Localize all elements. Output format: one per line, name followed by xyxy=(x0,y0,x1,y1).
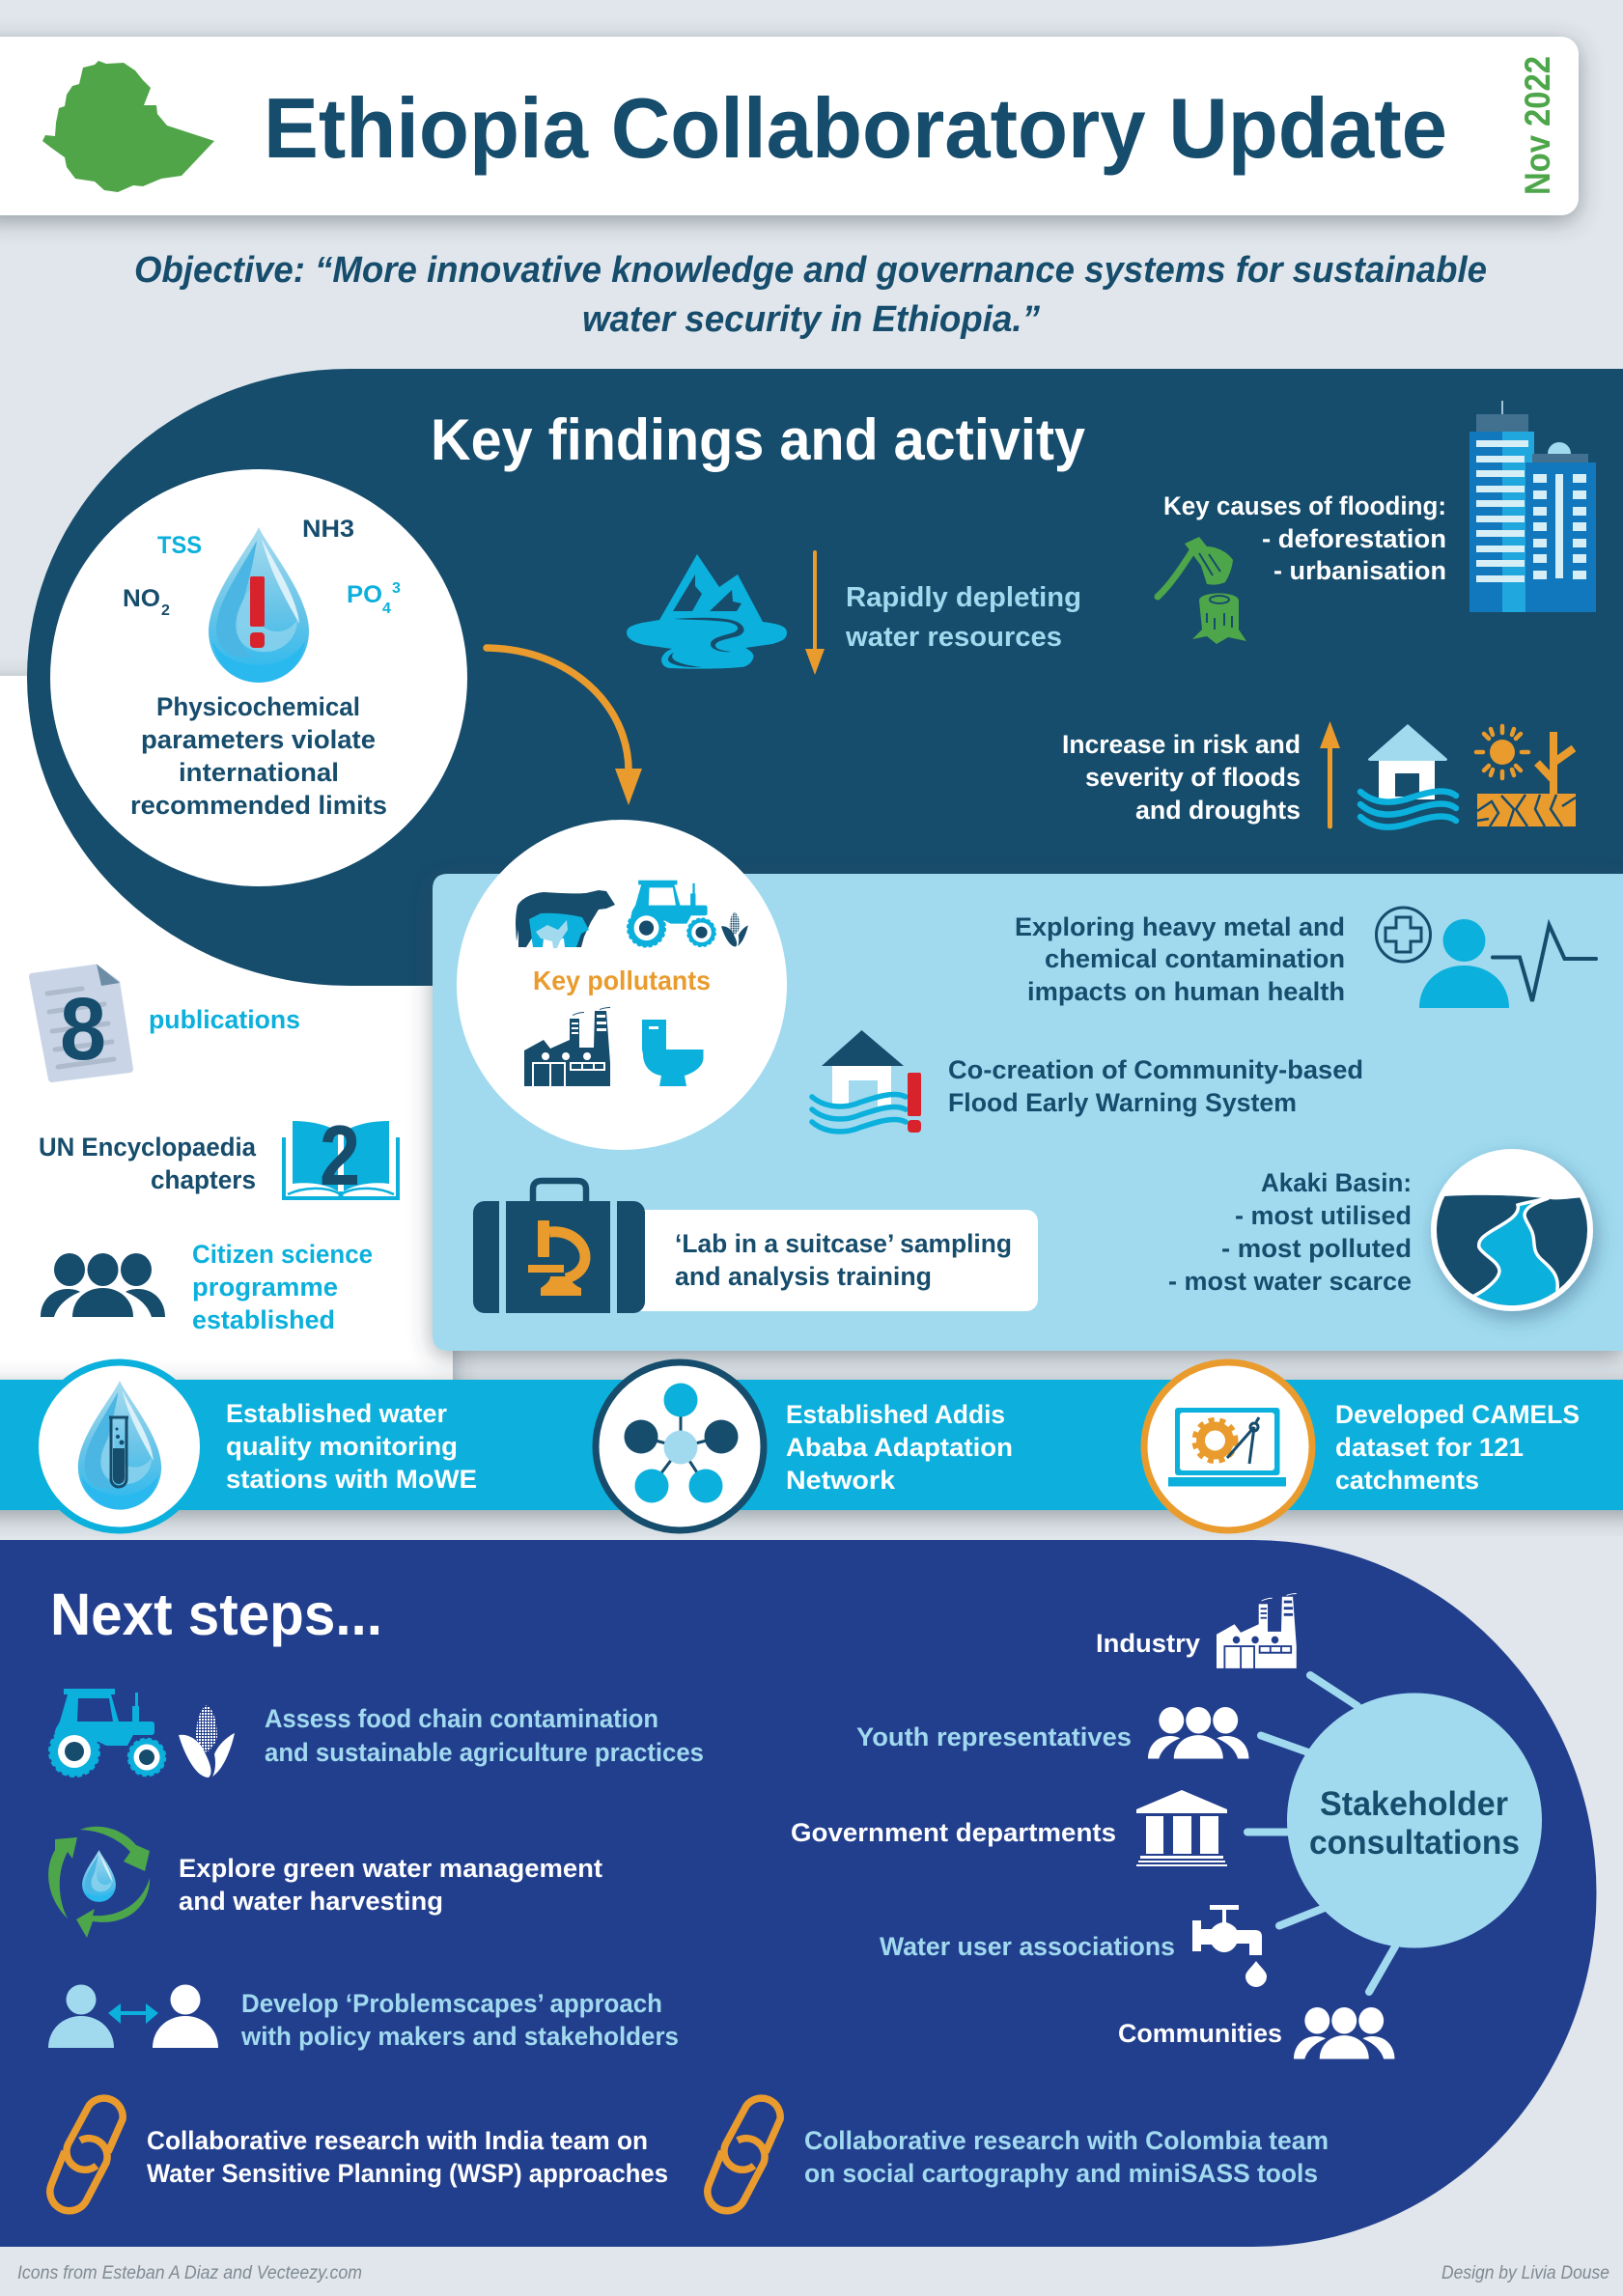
step: food chain: and sustainable agriculture practices xyxy=(265,1738,704,1767)
output: publications: 8 xyxy=(60,980,106,1078)
icon: Ethiopia map xyxy=(42,61,214,192)
footer: design credit: Design by Livia Douse xyxy=(1441,2263,1609,2283)
circle: physicochemical parameters: parameters violate xyxy=(141,725,376,754)
callout: lab in a suitcase: ‘Lab in a suitcase’ sampling xyxy=(675,1229,1012,1258)
step: India collaboration: Water Sensitive Planning (WSP) approaches xyxy=(147,2159,668,2188)
panel: next steps xyxy=(0,1540,1597,2247)
step: Colombia collaboration: Collaborative research with Colombia team xyxy=(804,2126,1329,2155)
circle: physicochemical parameters: PO xyxy=(347,581,382,608)
text: heavy metals: Exploring heavy metal and xyxy=(1015,912,1345,941)
text: floods and droughts: severity of floods xyxy=(1085,763,1301,792)
text: heavy metals: chemical contamination xyxy=(1045,944,1345,973)
output: citizen science: programme xyxy=(192,1273,338,1302)
step: green water xyxy=(48,1827,602,1938)
circle: adaptation network xyxy=(596,1362,764,1530)
heading: key findings: Key findings and activity xyxy=(431,407,1086,472)
text: adaptation network: Ababa Adaptation xyxy=(786,1433,1013,1462)
text: flood early warning xyxy=(948,1055,1363,1117)
text: Akaki basin: - most polluted xyxy=(1221,1234,1412,1263)
icon: open book xyxy=(284,1107,398,1203)
step: green water: and water harvesting xyxy=(179,1887,443,1916)
icon: flooded house xyxy=(1360,724,1456,827)
circle: physicochemical parameters: 3 xyxy=(392,580,401,597)
callout: lab in a suitcase: and analysis training xyxy=(675,1262,932,1291)
text: flood early warning: Flood Early Warning System xyxy=(948,1088,1297,1117)
footer: icon credit: Icons from Esteban A Diaz and Vecteezy.com xyxy=(17,2263,362,2283)
text: floods and droughts: Increase in risk and xyxy=(1062,730,1301,759)
output: citizen science xyxy=(41,1240,373,1334)
stakeholder: industry: Industry xyxy=(1096,1629,1200,1658)
text: depleting water xyxy=(845,582,1081,653)
callout: lab in a suitcase xyxy=(579,1210,1038,1311)
icon: toilet xyxy=(642,1020,703,1086)
objective statement: water security in Ethiopia.” xyxy=(582,299,1040,340)
text: CAMELS dataset: dataset for 121 xyxy=(1335,1433,1524,1462)
text: Akaki basin xyxy=(1168,1168,1412,1296)
text: causes of flooding xyxy=(1163,491,1446,585)
circle: physicochemical parameters xyxy=(50,469,467,886)
text: floods and droughts xyxy=(1062,730,1301,825)
icon: depleted mountain lake xyxy=(627,554,787,669)
stakeholder: water users: Water user associations xyxy=(880,1932,1175,1961)
output: citizen science: Citizen science xyxy=(192,1240,373,1269)
stakeholder consultations: consultations xyxy=(1309,1824,1520,1862)
stakeholder: government xyxy=(791,1790,1227,1866)
heading: next steps: Next steps... xyxy=(50,1582,382,1647)
text: floods and droughts: and droughts xyxy=(1135,796,1301,825)
stakeholder: communities xyxy=(1118,2007,1394,2058)
text: CAMELS dataset: catchments xyxy=(1335,1466,1479,1495)
output: encyclopaedia chapters: chapters xyxy=(151,1165,256,1194)
text: depleting water: Rapidly depleting xyxy=(846,582,1081,613)
step: problemscapes xyxy=(48,1985,679,2051)
arrow: increase xyxy=(1320,721,1340,826)
icon: drought sun and tree xyxy=(1476,726,1576,826)
icon: factory xyxy=(524,1007,610,1086)
text: adaptation network: Established Addis xyxy=(786,1400,1005,1429)
circle: physicochemical parameters: recommended limits xyxy=(130,791,387,820)
header banner xyxy=(0,37,1579,215)
stakeholder: youth xyxy=(856,1707,1248,1758)
text: adaptation network: Network xyxy=(786,1466,896,1495)
step: India collaboration: Collaborative research with India team on xyxy=(147,2126,648,2155)
icon: river basin xyxy=(1429,1149,1603,1318)
text: Akaki basin: - most water scarce xyxy=(1168,1267,1412,1296)
icon: city buildings xyxy=(1469,401,1596,612)
panel: activities xyxy=(433,820,1623,1351)
icon: flood warning xyxy=(812,1030,921,1133)
output: publications xyxy=(29,964,300,1082)
text: water quality stations: Established water xyxy=(226,1399,447,1428)
stakeholder: industry xyxy=(1096,1593,1297,1668)
circle: physicochemical parameters: NO xyxy=(123,585,160,612)
text: heavy metals xyxy=(1015,912,1345,1006)
output: citizen science: established xyxy=(192,1305,335,1334)
label: key pollutants: Key pollutants xyxy=(533,966,711,995)
text: causes of flooding: - urbanisation xyxy=(1273,556,1446,585)
icon: corn xyxy=(721,911,748,946)
output: publications: publications xyxy=(149,1005,300,1034)
step: Colombia collaboration: on social cartography and miniSASS tools xyxy=(804,2159,1318,2188)
icon: livestock xyxy=(516,890,615,948)
step: problemscapes: Develop ‘Problemscapes’ approach xyxy=(241,1989,662,2018)
arrow: depleting xyxy=(805,552,825,675)
date: Nov 2022 xyxy=(1518,56,1557,195)
stakeholder: communities: Communities xyxy=(1118,2019,1282,2048)
icon: axe and stump xyxy=(1158,537,1246,644)
circle: physicochemical parameters: TSS xyxy=(157,532,202,559)
title: Ethiopia Collaboratory Update xyxy=(264,80,1447,176)
icon: citizen group xyxy=(41,1253,165,1317)
circle: physicochemical parameters: international xyxy=(179,758,339,787)
icon: tractor xyxy=(628,881,715,947)
circle: CAMELS dataset xyxy=(1144,1362,1312,1530)
text: water quality stations xyxy=(226,1399,477,1494)
text: water quality stations: stations with MoWE xyxy=(226,1465,477,1494)
text: CAMELS dataset xyxy=(1335,1400,1580,1495)
stakeholder: water users xyxy=(880,1905,1267,1987)
panel: key findings xyxy=(27,369,1623,986)
text: flood early warning: Co-creation of Community-based xyxy=(948,1055,1363,1084)
text: heavy metals: impacts on human health xyxy=(1027,977,1345,1006)
step: food chain xyxy=(50,1689,704,1778)
panel: outputs on white xyxy=(0,676,453,1410)
icon: suitcase with microscope xyxy=(473,1181,645,1313)
stakeholder consultations: Stakeholder xyxy=(1320,1785,1508,1823)
step: India collaboration xyxy=(50,2098,668,2211)
icon: warning drop xyxy=(209,527,309,683)
text: depleting water: water resources xyxy=(845,622,1062,653)
stakeholder consultations xyxy=(791,1593,1542,2058)
step: green water: Explore green water management xyxy=(179,1854,602,1883)
step: problemscapes: with policy makers and stakeholders xyxy=(240,2022,679,2051)
icon: open book: 2 xyxy=(320,1107,360,1203)
text: Akaki basin: Akaki Basin: xyxy=(1261,1168,1412,1197)
objective statement xyxy=(134,250,1487,340)
band: established outputs xyxy=(0,1362,1623,1530)
circle: physicochemical parameters: Physicochemical xyxy=(156,692,360,721)
objective statement: Objective: “More innovative knowledge and governance systems for sustainable xyxy=(134,250,1487,291)
text: adaptation network xyxy=(786,1400,1013,1495)
circle: key pollutants xyxy=(457,820,787,1150)
stakeholder: government: Government departments xyxy=(791,1818,1116,1847)
step: Colombia collaboration xyxy=(708,2098,1329,2211)
icon: human health xyxy=(1377,908,1596,1008)
circle: water quality stations xyxy=(35,1362,203,1530)
circle: physicochemical parameters: 2 xyxy=(161,602,170,619)
text: CAMELS dataset: Developed CAMELS xyxy=(1335,1400,1580,1429)
arrow: to pollutants xyxy=(487,648,642,805)
text: Akaki basin: - most utilised xyxy=(1235,1201,1412,1230)
output: encyclopaedia chapters xyxy=(39,1107,398,1203)
output: encyclopaedia chapters: UN Encyclopaedia xyxy=(39,1133,257,1162)
text: causes of flooding: Key causes of flooding: xyxy=(1163,491,1446,520)
text: causes of flooding: - deforestation xyxy=(1262,524,1446,553)
circle: physicochemical parameters: NH3 xyxy=(302,516,354,543)
circle: physicochemical parameters: 4 xyxy=(382,601,391,617)
text: water quality stations: quality monitoring xyxy=(226,1432,458,1461)
stakeholder: youth: Youth representatives xyxy=(856,1722,1132,1751)
step: food chain: Assess food chain contamination xyxy=(265,1704,658,1733)
